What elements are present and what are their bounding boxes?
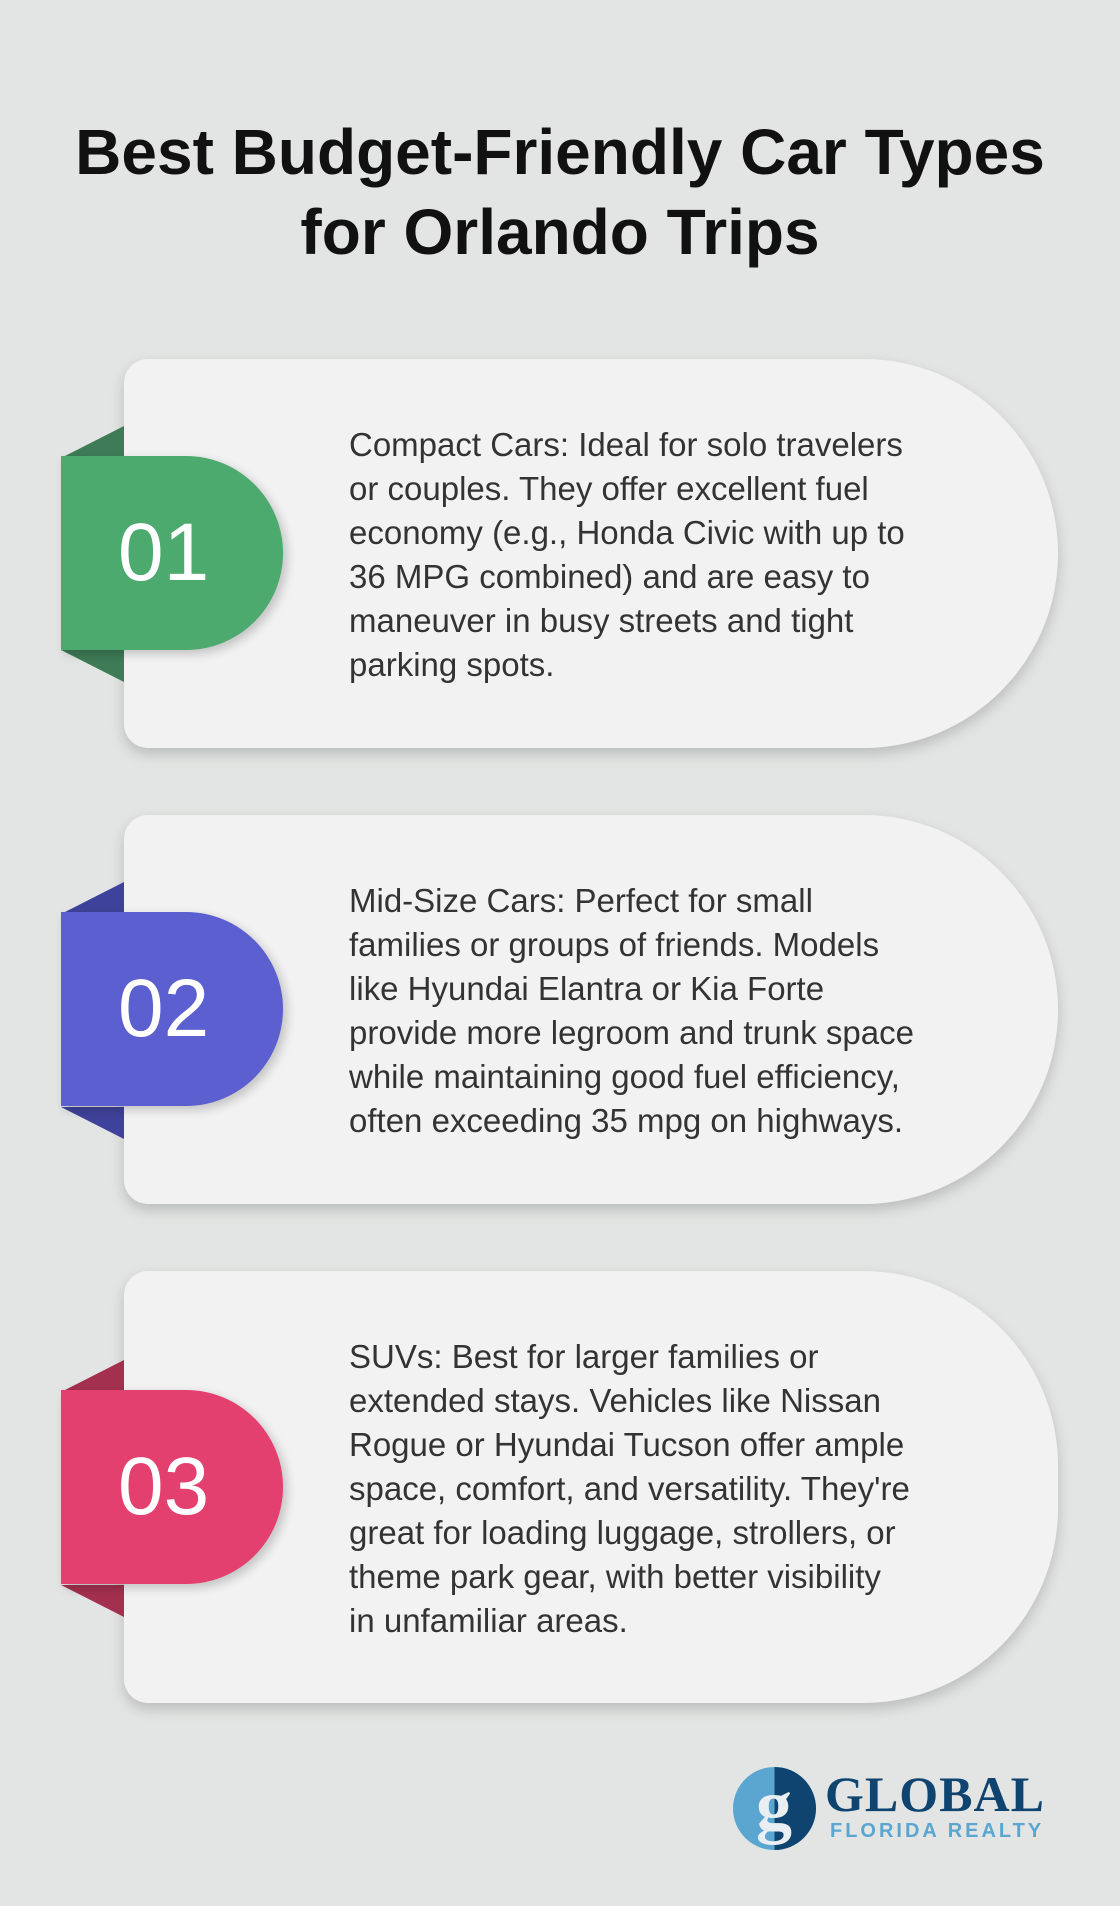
badge 03 bbox=[61, 1390, 283, 1584]
text: compact cars: Compact Cars: Ideal for solo travelers bbox=[349, 426, 903, 463]
text: mid-size cars bbox=[349, 882, 914, 1139]
text: compact cars: economy (e.g., Honda Civic with up to bbox=[349, 514, 905, 551]
text: SUVs: space, comfort, and versatility. They're bbox=[349, 1470, 910, 1507]
panel: mid-size cars bbox=[124, 815, 1058, 1204]
title: for Orlando Trips bbox=[300, 196, 820, 268]
logo text: GLOBAL bbox=[825, 1766, 1045, 1822]
text: SUVs: extended stays. Vehicles like Nissan bbox=[349, 1382, 881, 1419]
text: compact cars: or couples. They offer excellent fuel bbox=[349, 470, 869, 507]
badge 01: 01 bbox=[118, 507, 209, 598]
badge 02 bbox=[61, 912, 283, 1106]
title bbox=[75, 116, 1045, 268]
badge 03: 03 bbox=[118, 1441, 209, 1532]
fold top 2 bbox=[65, 882, 124, 912]
badge 02: 02 bbox=[118, 963, 209, 1054]
panel: SUVs bbox=[124, 1271, 1058, 1703]
text: SUVs bbox=[349, 1338, 910, 1639]
fold top 3 bbox=[65, 1360, 124, 1390]
text: mid-size cars: while maintaining good fuel efficiency, bbox=[349, 1058, 900, 1095]
fold top 1 bbox=[65, 426, 124, 456]
text: mid-size cars: families or groups of friends. Models bbox=[349, 926, 879, 963]
text: SUVs: great for loading luggage, strollers, or bbox=[349, 1514, 896, 1551]
text: SUVs: in unfamiliar areas. bbox=[349, 1602, 628, 1639]
text: SUVs: SUVs: Best for larger families or bbox=[349, 1338, 818, 1375]
text: SUVs: theme park gear, with better visibility bbox=[349, 1558, 881, 1595]
text: compact cars: parking spots. bbox=[349, 646, 554, 683]
icon: g circle: g bbox=[756, 1767, 792, 1845]
title: Best Budget-Friendly Car Types bbox=[75, 116, 1045, 188]
fold bottom 2 bbox=[61, 1107, 124, 1139]
text: mid-size cars: provide more legroom and trunk space bbox=[349, 1014, 914, 1051]
logo: FLORIDA REALTY bbox=[830, 1820, 1044, 1842]
text: compact cars bbox=[349, 426, 905, 683]
text: compact cars: 36 MPG combined) and are easy to bbox=[349, 558, 870, 595]
logo bbox=[733, 1766, 1045, 1850]
text: mid-size cars: like Hyundai Elantra or Kia Forte bbox=[349, 970, 824, 1007]
fold bottom 3 bbox=[61, 1585, 124, 1617]
panel: compact cars bbox=[124, 359, 1058, 748]
icon: g circle bbox=[733, 1767, 816, 1850]
fold bottom 1 bbox=[61, 650, 124, 682]
text: compact cars: maneuver in busy streets and tight bbox=[349, 602, 853, 639]
text: mid-size cars: often exceeding 35 mpg on highways. bbox=[349, 1102, 903, 1139]
text: SUVs: Rogue or Hyundai Tucson offer ample bbox=[349, 1426, 904, 1463]
text: mid-size cars: Mid-Size Cars: Perfect for small bbox=[349, 882, 813, 919]
badge 01 bbox=[61, 456, 283, 650]
